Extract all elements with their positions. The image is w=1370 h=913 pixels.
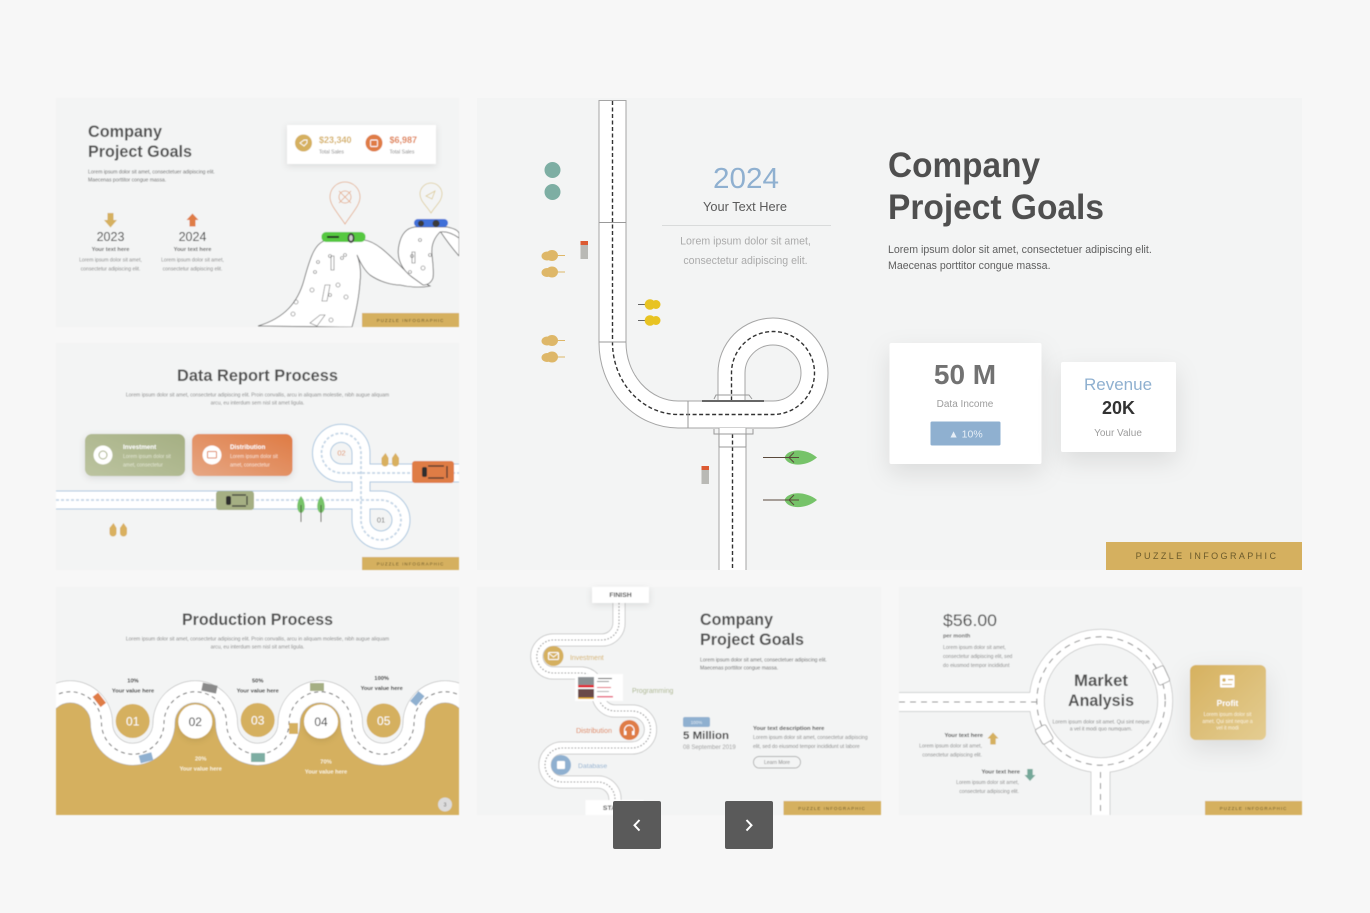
trees: gold lower [110, 523, 127, 536]
card: revenue [1061, 362, 1176, 452]
card: profit: amet. Qui sint neque a [1202, 719, 1253, 725]
tag [362, 313, 459, 327]
car: orange [412, 461, 454, 483]
year 2024 block: consectetur adipiscing elit. [163, 266, 222, 272]
year 2023 block: consectetur adipiscing elit. [81, 266, 140, 272]
description block [753, 726, 868, 768]
text block: upper: Lorem ipsum dolor sit amet, [919, 744, 982, 750]
year 2023 block: Lorem ipsum dolor sit amet, [79, 258, 142, 264]
per month: per month [943, 634, 971, 640]
badge: ▲ 10% [948, 428, 983, 440]
tag: PUZZLE INFOGRAPHIC [798, 806, 866, 811]
icon: investment [94, 446, 112, 464]
description block: Your text description here [753, 726, 825, 732]
date: 08 September 2019 [683, 745, 736, 751]
title: Company [88, 122, 163, 141]
text block: lower: Your text here [981, 770, 1021, 776]
step 03: 03 [251, 714, 265, 728]
price description: Lorem ipsum dolor sit amet, [943, 645, 1006, 651]
page number: 3 [444, 802, 447, 808]
year: 2024 [713, 163, 779, 195]
price: $56.00 [943, 611, 997, 630]
year 2023 block [79, 230, 142, 272]
description: Lorem ipsum dolor sit amet, consectetuer adipiscing elit. [88, 170, 215, 176]
label: database: Database [578, 763, 607, 770]
card: distribution: Lorem ipsum dolor sit [230, 454, 278, 460]
card: investment [85, 434, 185, 476]
label 50%: 50% [252, 678, 263, 684]
description: Maecenas porttitor congue massa. [700, 666, 778, 672]
description: arcu, eu interdum sem nisl sit amet ligula. [211, 400, 304, 406]
arrow up [988, 732, 998, 744]
card: profit: Profit [1217, 698, 1239, 708]
start sign [586, 800, 644, 815]
description: Lorem ipsum dolor sit amet, consectetuer adipiscing elit. [700, 658, 827, 664]
arrow: previous button [613, 801, 661, 849]
description: Maecenas porttitor congue massa. [888, 260, 1051, 272]
card: distribution [192, 434, 292, 476]
step 02: 02 [189, 715, 202, 729]
label 70%: 70% [320, 760, 332, 766]
slide background [56, 98, 459, 327]
label one: Total Sales [319, 150, 344, 156]
cars on road [93, 683, 425, 763]
badge [930, 422, 1000, 446]
label: investment: Investment [570, 655, 604, 662]
text block: lower [956, 770, 1021, 795]
year 2024 block [161, 230, 224, 272]
label 70%: Your value here [305, 770, 347, 776]
panel: slide data report process [56, 368, 460, 571]
stat block [683, 717, 736, 751]
title: Project Goals [700, 630, 804, 649]
tag [1205, 801, 1302, 815]
title: Project Goals [888, 188, 1104, 227]
icon: database [551, 755, 571, 775]
trees: green [297, 496, 325, 522]
step 05 [367, 704, 401, 738]
label 100%: Your value here [361, 686, 403, 692]
trees: green leaves [763, 450, 817, 507]
roundabout road [899, 637, 1165, 815]
value: 50 M [934, 359, 996, 390]
road illustration [258, 227, 459, 327]
step 02 [178, 704, 212, 738]
description: consectetur adipiscing elit. [683, 255, 808, 267]
description: arcu, eu interdum sem nisl sit amet ligula. [211, 644, 304, 650]
text block: lower: consectetur adipiscing elit. [959, 789, 1019, 795]
text block: upper: consectetur adipiscing elit. [922, 752, 982, 758]
trees: gold upper [382, 453, 399, 467]
step 01: 01 [126, 714, 140, 728]
card: profit: Lorem ipsum dolor sit [1204, 712, 1252, 718]
label two: Total Sales [390, 150, 415, 156]
icon: tag [295, 134, 312, 152]
panel: main slide company project goals [477, 98, 1302, 570]
finish sign [592, 587, 649, 603]
text block: lower: Lorem ipsum dolor sit amet, [956, 780, 1019, 786]
panel: slide company project goals top left [78, 124, 460, 328]
year 2023 block: 2023 [97, 230, 124, 244]
panel: slide market analysis [898, 613, 1303, 816]
road sign lower [702, 466, 709, 484]
car: olive [216, 491, 254, 510]
text block: upper: Your text here [944, 733, 984, 739]
icon: calendar [366, 134, 382, 152]
road: loop [599, 100, 814, 570]
badge: 100% [691, 720, 702, 725]
panel: slide production process [55, 612, 460, 816]
label: distribution: Distribution [576, 726, 612, 735]
main slide background [477, 98, 1302, 570]
description: Lorem ipsum dolor sit amet, [680, 236, 811, 248]
description block: Lorem ipsum dolor sit amet, consectetur adipiscing [753, 735, 868, 741]
label 10%: Your value here [112, 688, 154, 694]
pin: gold [420, 183, 442, 213]
year 2024 block: Your text here [174, 247, 211, 253]
label: programming: Programming [632, 688, 674, 695]
road sign upper [580, 241, 588, 259]
step circles [116, 703, 401, 738]
description: Lorem ipsum dolor sit amet, consectetur adipiscing elit. Proin convallis, arcu in aliquam molestie, nibh augue aliquam [126, 636, 389, 642]
description: Lorem ipsum dolor sit amet, consectetur adipiscing elit. Proin convallis, arcu in aliquam molestie, nibh augue aliquam [126, 392, 389, 398]
description: Maecenas porttitor congue massa. [88, 178, 166, 184]
title: Project Goals [88, 142, 192, 161]
arrow: next button [725, 801, 773, 849]
center description: Lorem ipsum dolor sit amet. Qui sint neque [1052, 720, 1150, 726]
cars on roundabout [1035, 665, 1170, 745]
title [888, 146, 1104, 227]
arrow down [104, 213, 117, 228]
label 100%: 100% [374, 676, 389, 682]
tag: PUZZLE INFOGRAPHIC [377, 562, 444, 566]
number 01: 01 [377, 516, 385, 524]
text block: upper [919, 733, 984, 758]
thumbnail card [575, 674, 623, 701]
amount: 5 Million [683, 730, 729, 742]
amount two: $6,987 [390, 135, 417, 145]
winding road [537, 603, 650, 815]
card: distribution: Distribution [230, 444, 265, 451]
step 04: 04 [314, 715, 328, 729]
card: distribution: amet, consectetur [230, 462, 270, 468]
step 04 [304, 704, 338, 738]
description: Lorem ipsum dolor sit amet, consectetuer adipiscing elit. [888, 244, 1152, 256]
label: Your Value [1094, 428, 1142, 439]
amount one: $23,340 [319, 135, 352, 145]
card: investment: Investment [123, 444, 157, 451]
tag [362, 557, 459, 570]
card: profit [1190, 665, 1266, 740]
trees: yellow right [638, 299, 660, 326]
price description: consectetur adipiscing elit, sed [943, 654, 1013, 660]
price description: do eiusmod tempor incididunt [943, 663, 1010, 669]
slide background [56, 587, 459, 815]
title: Company [700, 610, 774, 629]
year 2023 block: Your text here [92, 247, 129, 253]
slide background [899, 587, 1302, 815]
slide background [477, 587, 881, 815]
description block: elit, sed do eiusmod tempor incididunt ut labore [753, 744, 860, 750]
panel: slide winding road [477, 587, 881, 815]
year 2024 block: Lorem ipsum dolor sit amet, [161, 258, 224, 264]
card: data income [890, 343, 1042, 464]
value: 20K [1102, 398, 1135, 418]
label 50%: Your value here [237, 688, 279, 694]
arrow up [186, 214, 198, 226]
tag: PUZZLE INFOGRAPHIC [1220, 806, 1287, 811]
tag [784, 801, 881, 815]
icon: distribution [619, 720, 639, 740]
title: Company [888, 146, 1041, 185]
year block [662, 163, 831, 267]
icon: distribution [202, 446, 222, 464]
finish sign: FINISH [609, 592, 632, 599]
pin: orange [330, 182, 360, 224]
year 2024 block: 2024 [179, 230, 206, 244]
trees: teal circles [544, 162, 560, 200]
page number [438, 798, 452, 812]
card: investment: Lorem ipsum dolor sit [123, 454, 171, 460]
label 20%: Your value here [180, 766, 222, 772]
title [88, 122, 192, 161]
tag [1106, 542, 1302, 570]
card: investment: amet, consectetur [123, 462, 163, 468]
tag: PUZZLE INFOGRAPHIC [377, 318, 444, 323]
center description: a vel it modi quo numquam. [1070, 726, 1132, 732]
icon: profit [1220, 675, 1234, 688]
button: Learn More [764, 760, 790, 766]
sales card [287, 125, 436, 164]
center title: Analysis [1068, 691, 1134, 710]
trees: gold left [542, 250, 565, 362]
number 02: 02 [337, 448, 346, 458]
slide background [56, 343, 459, 570]
label 20%: 20% [195, 756, 206, 762]
center title [1068, 671, 1134, 710]
title: Production Process [182, 610, 333, 629]
label: Data Income [937, 399, 994, 410]
heading: Revenue [1084, 375, 1152, 394]
step 01 [116, 704, 150, 738]
card: profit: vel it modi [1216, 726, 1239, 732]
arrow down [1025, 769, 1036, 781]
title [700, 610, 804, 649]
center title: Market [1074, 671, 1128, 690]
title: Data Report Process [177, 366, 338, 385]
road [56, 433, 459, 540]
wave road [39, 692, 476, 815]
icon: investment [544, 646, 564, 666]
label 10%: 10% [127, 678, 139, 684]
start sign: START [603, 805, 626, 812]
car: green [322, 232, 366, 243]
step 05: 05 [377, 714, 391, 728]
subheading: Your Text Here [703, 199, 787, 214]
tag: PUZZLE INFOGRAPHIC [1136, 551, 1278, 561]
car: blue [414, 219, 448, 227]
step 03 [241, 703, 275, 737]
